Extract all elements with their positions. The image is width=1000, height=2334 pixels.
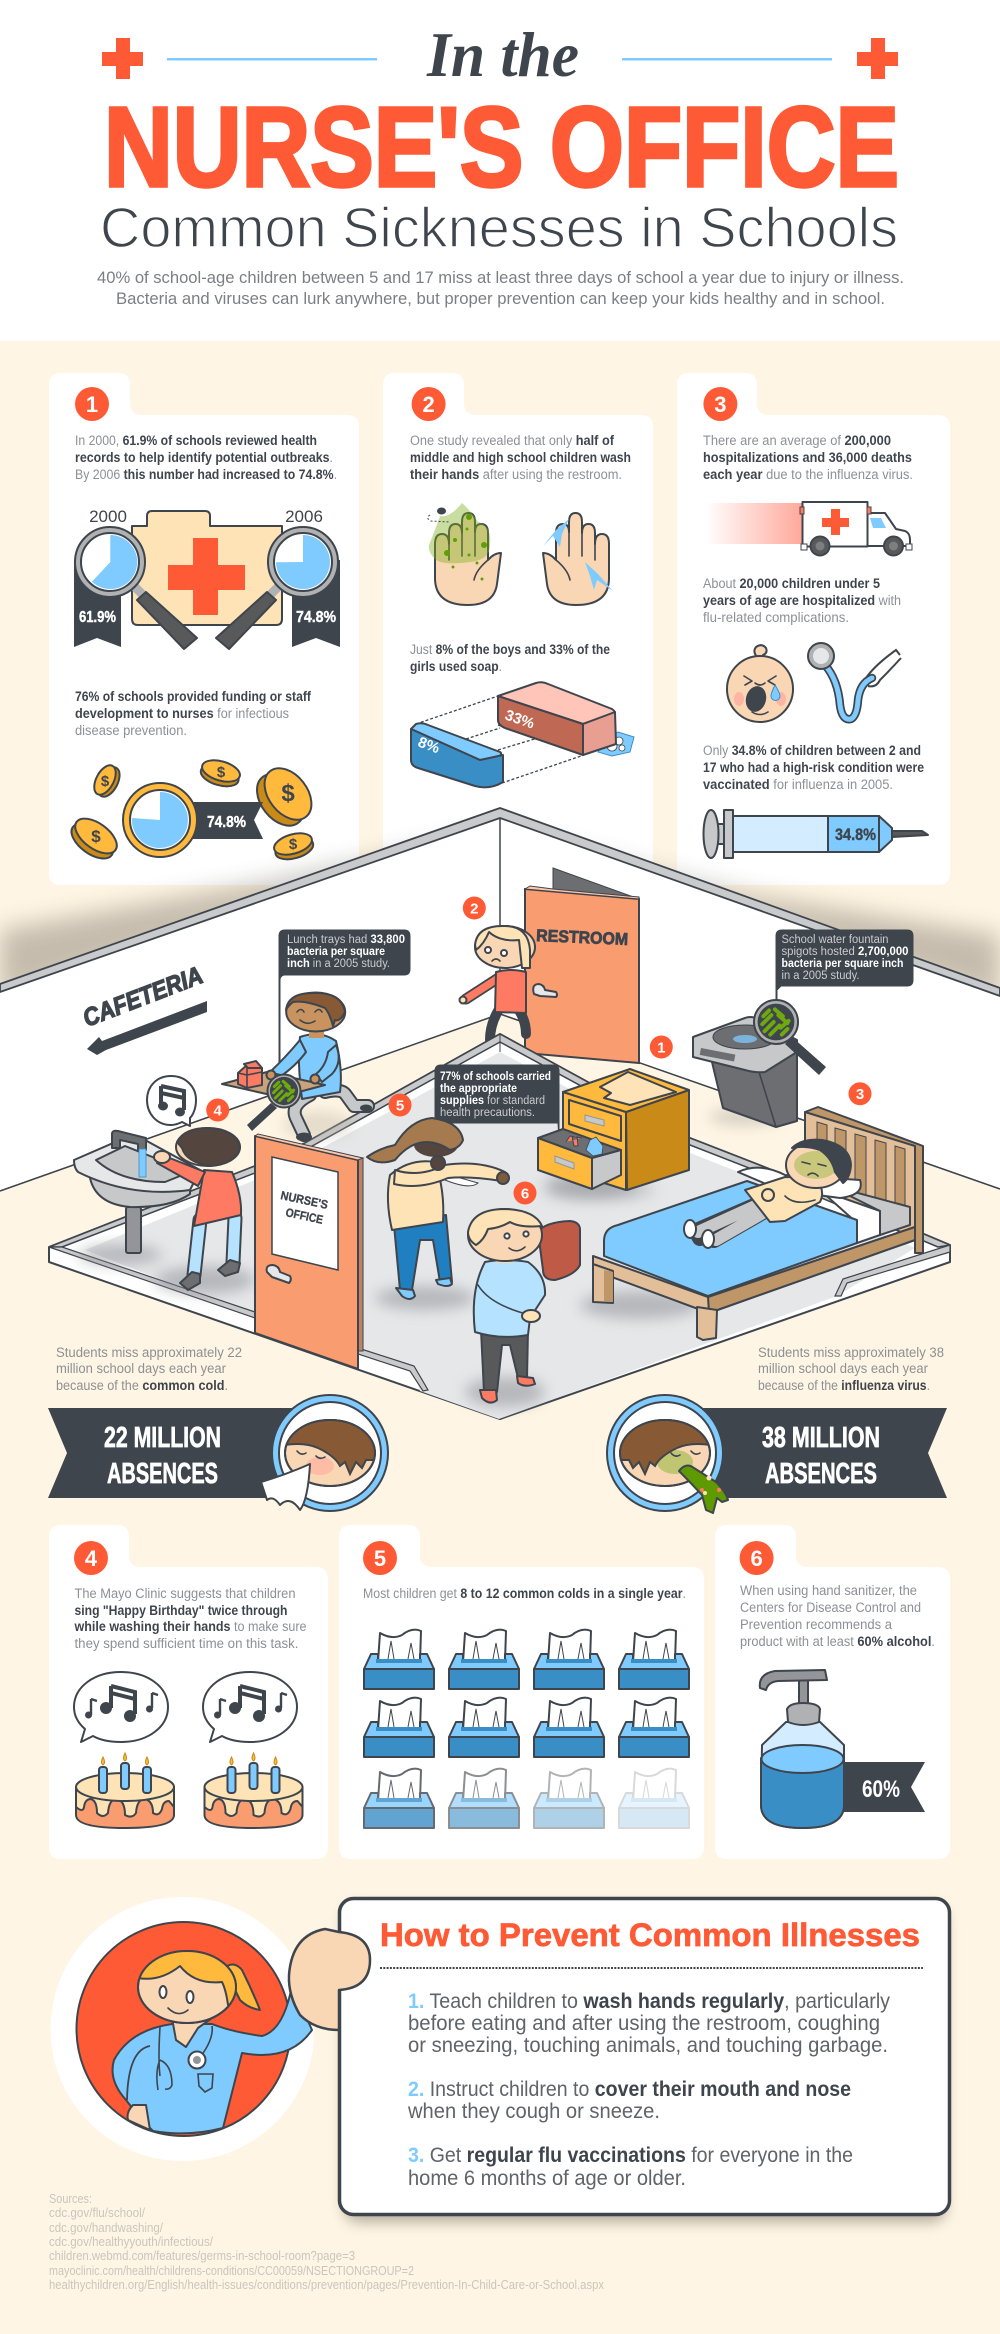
panel: card 5 common colds xyxy=(339,1525,704,1859)
text: records: By 2006 this number had increased to 74.8%. xyxy=(75,467,337,482)
text: common cold: because of the common cold. xyxy=(56,1378,228,1393)
tip 3 xyxy=(408,2144,853,2190)
text: funding: development to nurses for infectious xyxy=(75,706,289,721)
box xyxy=(340,1898,950,2214)
corridor floor xyxy=(0,1014,1000,1300)
text: funding xyxy=(75,689,311,738)
banner: 22 million absences: 22 MILLION xyxy=(104,1422,221,1454)
number badge 4: 4 xyxy=(85,1546,98,1571)
text: vaccinated: Only 34.8% of children between 2 and xyxy=(703,743,921,758)
student with lunch tray xyxy=(222,992,372,1142)
back wall top band xyxy=(49,1034,950,1247)
callout: water fountain: School water fountain xyxy=(782,934,888,946)
icon: coins xyxy=(65,756,321,865)
roof band xyxy=(0,808,1000,996)
magnifier: tray bacteria xyxy=(247,1074,300,1131)
tip 1: before eating and after using the restroom, coughing xyxy=(408,2012,880,2035)
decorative line left xyxy=(167,58,377,60)
sources: cdc.gov/flu/school/ xyxy=(49,2206,145,2220)
icon: music bubble 1 xyxy=(74,1672,168,1742)
music speech bubble xyxy=(147,1076,196,1126)
icon: coins: $ xyxy=(101,773,110,790)
text: common cold: Students miss approximately 22 xyxy=(56,1345,242,1360)
icon: coins: $ xyxy=(217,764,226,781)
text: hospitalizations: There are an average of 200,000 xyxy=(703,433,891,448)
sources: healthychildren.org/English/health-issues/conditions/prevention/pages/Prevention-In-Child-Care-or-School.aspx xyxy=(49,2278,605,2292)
title script: In the xyxy=(426,19,579,90)
intro text: Bacteria and viruses can lurk anywhere, but proper prevention can keep your kids healthy and in school. xyxy=(116,289,885,308)
badge 3: 3 xyxy=(856,1086,864,1103)
icon: right plus xyxy=(857,38,898,79)
tip 3: home 6 months of age or older. xyxy=(408,2167,686,2190)
badge 5: 5 xyxy=(396,1098,404,1114)
text: common cold: million school days each year xyxy=(56,1361,226,1376)
text: hospitalizations xyxy=(703,433,913,482)
callout: lunch trays: Lunch trays had 33,800 xyxy=(287,934,405,946)
callout: supplies: supplies for standard xyxy=(440,1095,545,1107)
number badge 3: 3 xyxy=(714,392,727,417)
text: mayo clinic: they spend sufficient time on this task. xyxy=(74,1636,298,1651)
icon: sanitizer bottle xyxy=(760,1670,844,1828)
sources: children.webmd.com/features/germs-in-school-room?page=3 xyxy=(49,2249,355,2263)
box shadow xyxy=(344,1906,946,2222)
water fountain xyxy=(693,1017,797,1127)
chart: syringe 34.8%: 34.8% xyxy=(835,825,876,844)
blue mattress xyxy=(604,1181,857,1296)
callout: lunch trays: bacteria per square xyxy=(287,946,385,958)
tip 3: 3. Get regular flu vaccinations for everyone in the xyxy=(408,2144,853,2167)
panel: card 6 hand sanitizer xyxy=(715,1525,950,1859)
text: wash hands: their hands after using the restroom. xyxy=(410,467,622,482)
callout: water fountain: bacteria per square inch xyxy=(782,958,904,970)
text: hospitalizations: hospitalizations and 36,000 deaths xyxy=(703,450,912,465)
nurse body xyxy=(112,1985,312,2133)
icon: stethoscope xyxy=(808,643,901,719)
text: mayo clinic: The Mayo Clinic suggests that children xyxy=(74,1586,296,1601)
callout: supplies: the appropriate xyxy=(440,1083,517,1095)
nurse's office door xyxy=(255,1134,363,1369)
ribbon 61.9% xyxy=(74,560,121,647)
badge 3 xyxy=(848,1082,872,1105)
icon: left plus xyxy=(102,38,143,79)
banner: 38 million absences: 38 MILLION xyxy=(762,1422,880,1454)
intro text: 40% of school-age children between 5 and 17 miss at least three days of school a year due to injury or illness. xyxy=(97,268,904,287)
badge 2: 2 xyxy=(470,900,478,918)
text: wash hands: middle and high school children wash xyxy=(410,450,631,465)
text: influenza: because of the influenza virus. xyxy=(758,1378,930,1393)
text: records: In 2000, 61.9% of schools reviewed health xyxy=(75,433,317,448)
text: influenza xyxy=(758,1345,944,1393)
sources: cdc.gov/healthyyouth/infectious/ xyxy=(49,2235,213,2249)
number badge 2 xyxy=(412,387,446,421)
subtitle: Common Sicknesses in Schools xyxy=(100,196,898,260)
icon: coins: $ xyxy=(281,780,295,807)
student washing hands xyxy=(154,1128,241,1290)
sources: Sources: xyxy=(49,2192,92,2206)
callout: water fountain: spigots hosted 2,700,000 xyxy=(782,946,908,958)
card background xyxy=(383,373,653,885)
nurse illustration xyxy=(50,1897,370,2161)
chart: soap bars xyxy=(411,682,634,787)
ribbon 74.8% xyxy=(292,560,340,647)
callout: supplies xyxy=(435,1065,559,1140)
callout: supplies: 77% of schools carried xyxy=(440,1071,551,1083)
text: common cold xyxy=(56,1345,242,1393)
back walls xyxy=(0,810,1000,1191)
text: influenza: Students miss approximately 38 xyxy=(758,1345,944,1360)
bed xyxy=(593,1107,923,1340)
nurse head xyxy=(138,1945,260,2023)
white sheet xyxy=(820,1190,880,1243)
student coughing xyxy=(367,1118,509,1299)
icon: crying baby xyxy=(727,645,793,722)
panel: card 4 sing happy birthday xyxy=(49,1525,328,1859)
text: funding: 76% of schools provided funding or staff xyxy=(75,689,311,704)
nurse hip hand xyxy=(128,2105,150,2130)
student 2 at restroom xyxy=(460,926,535,1040)
year 2006: 2006 xyxy=(285,507,323,526)
number badge 1: 1 xyxy=(86,392,98,417)
sink xyxy=(74,1131,200,1253)
header white band xyxy=(0,0,1000,341)
text: mayo clinic: sing "Happy Birthday" twice through xyxy=(74,1603,288,1618)
number badge 1 xyxy=(75,387,109,421)
text: soap xyxy=(410,642,610,674)
title block xyxy=(97,19,904,308)
banner: 22 million absences: ABSENCES xyxy=(107,1458,218,1490)
nurse hand on box xyxy=(289,1929,370,2030)
icon: music bubble 2 xyxy=(203,1672,297,1742)
card background xyxy=(677,373,950,885)
text: sanitizer: Prevention recommends a xyxy=(740,1617,892,1632)
badge 1 xyxy=(650,1036,673,1058)
red circle xyxy=(76,1922,290,2136)
restroom door: RESTROOM xyxy=(536,926,629,949)
white circle xyxy=(50,1897,314,2161)
text: sanitizer: Centers for Disease Control and xyxy=(740,1600,921,1615)
pillow xyxy=(738,1168,861,1198)
banner 60% xyxy=(840,1762,925,1812)
text: children under 5: years of age are hospitalized with xyxy=(703,593,901,608)
tip 1: 1. Teach children to wash hands regularly, particularly xyxy=(408,1990,890,2013)
text: wash hands: One study revealed that only half of xyxy=(410,433,614,448)
magnifier 2000 pie xyxy=(75,527,197,649)
badge 4: 4 xyxy=(214,1102,223,1120)
nurse's office door: NURSE'S xyxy=(279,1188,329,1212)
text: colds: Most children get 8 to 12 common colds in a single year. xyxy=(363,1586,686,1601)
heading: How to Prevent Common Illnesses xyxy=(380,1917,920,1953)
callout: water fountain xyxy=(776,930,913,1000)
intro text xyxy=(97,268,904,308)
sources xyxy=(49,2192,605,2292)
panel: card 2 hand washing xyxy=(383,373,653,885)
text: hospitalizations: each year due to the influenza virus. xyxy=(703,467,913,482)
stethoscope on nurse xyxy=(157,2026,213,2092)
badge 4 xyxy=(206,1098,229,1122)
dotted divider xyxy=(380,1967,923,1969)
number badge 5: 5 xyxy=(374,1546,386,1571)
text: vaccinated xyxy=(703,743,924,792)
callout: supplies: health precautions. xyxy=(440,1107,535,1119)
headboard xyxy=(805,1107,923,1253)
banner 60%: 60% xyxy=(862,1776,900,1803)
text: influenza: million school days each year xyxy=(758,1361,928,1376)
ribbon 74.8%: 74.8% xyxy=(296,609,336,626)
icon: medical folder xyxy=(132,511,282,625)
ribbon 61.9%: 61.9% xyxy=(79,609,116,626)
text: vaccinated: 17 who had a high-risk condition were xyxy=(703,760,924,775)
text: sanitizer xyxy=(740,1583,935,1649)
corner marker xyxy=(499,1034,501,1052)
badge 6: 6 xyxy=(521,1186,529,1202)
roof shadow xyxy=(0,832,1000,1000)
banner 74.8%: 74.8% xyxy=(207,814,246,831)
coin pie chart xyxy=(123,783,197,857)
chart: tissue boxes xyxy=(364,1630,689,1828)
icon: coins: $ xyxy=(289,836,298,853)
text: wash hands xyxy=(410,433,631,482)
panel: card 3 influenza xyxy=(677,373,950,885)
icon: coins: $ xyxy=(91,827,101,846)
panel: card 1 school health records xyxy=(49,373,359,885)
chart: syringe 34.8% xyxy=(704,810,928,858)
card background xyxy=(715,1525,950,1859)
badge 5 xyxy=(388,1094,412,1116)
floor xyxy=(85,1052,915,1419)
sources: cdc.gov/handwashing/ xyxy=(49,2221,163,2235)
badge 2 xyxy=(463,896,486,920)
number badge 5 xyxy=(363,1541,397,1575)
badge 1: 1 xyxy=(657,1040,665,1056)
student 6 with backpack xyxy=(468,1209,580,1403)
panel: prevention box xyxy=(340,1898,950,2222)
callout: water fountain: in a 2005 study. xyxy=(782,970,860,982)
room illustration xyxy=(0,808,1000,1419)
icon: clean hand xyxy=(543,513,613,605)
text: children under 5: flu-related complications. xyxy=(703,610,849,625)
icon: sneezing face xyxy=(261,1395,388,1511)
tip 2: 2. Instruct children to cover their mouth and nose xyxy=(408,2078,851,2101)
text: soap: girls used soap. xyxy=(410,659,502,674)
text: mayo clinic: while washing their hands to make sure xyxy=(74,1619,306,1634)
banner: 38 million absences xyxy=(607,1395,947,1513)
tip 1: or sneezing, touching animals, and touching garbage. xyxy=(408,2034,888,2057)
text: funding: disease prevention. xyxy=(75,723,187,738)
sign: cafeteria xyxy=(79,961,207,1055)
sources: mayoclinic.com/health/childrens-conditions/CC00059/NSECTIONGROUP=2 xyxy=(49,2264,414,2278)
magnifier: fountain bacteria xyxy=(754,1000,826,1075)
tip 1 xyxy=(408,1990,890,2057)
banner 74.8% xyxy=(190,802,263,839)
nurse's office door: OFFICE xyxy=(284,1205,324,1227)
tip 2 xyxy=(407,2078,851,2123)
text: sanitizer: When using hand sanitizer, the xyxy=(740,1583,917,1598)
nurse office floor xyxy=(49,1034,950,1419)
sign: cafeteria: CAFETERIA xyxy=(79,961,207,1033)
sick student xyxy=(684,1140,851,1248)
icon: cake 1 xyxy=(76,1753,174,1828)
text: vaccinated: vaccinated for influenza in 2005. xyxy=(703,777,893,792)
icon: cake 2 xyxy=(204,1753,302,1828)
decorative line right xyxy=(622,58,832,60)
badge 6 xyxy=(514,1182,536,1204)
icon: vomiting face xyxy=(607,1395,728,1513)
chart: soap bars: 33% xyxy=(503,707,537,733)
card background xyxy=(49,373,359,885)
magnifier 2006 pie xyxy=(216,527,338,649)
chart: soap bars: 8% xyxy=(416,734,442,757)
text: children under 5: About 20,000 children under 5 xyxy=(703,576,880,591)
restroom door xyxy=(525,868,639,1063)
tip 2: when they cough or sneeze. xyxy=(407,2100,660,2123)
callout: lunch trays: inch in a 2005 study. xyxy=(287,958,390,970)
card background xyxy=(339,1525,704,1859)
text: records: records to help identify potential outbreaks. xyxy=(75,450,333,465)
text: mayo clinic xyxy=(74,1586,306,1651)
frame xyxy=(593,1227,915,1313)
neck xyxy=(172,2018,212,2047)
number badge 6: 6 xyxy=(750,1546,763,1571)
drawer cabinet xyxy=(538,1069,689,1200)
icon: ambulance xyxy=(705,502,912,556)
wall corner and base lines xyxy=(0,818,1000,1191)
front wall top band xyxy=(49,1245,950,1391)
year 2000: 2000 xyxy=(89,507,127,526)
text: records xyxy=(75,433,337,482)
number badge 2: 2 xyxy=(422,392,435,417)
text: children under 5 xyxy=(703,576,901,625)
grey sheet xyxy=(828,1185,910,1235)
milk carton xyxy=(238,1061,262,1088)
callout: lunch trays xyxy=(279,930,410,1070)
number badge 6 xyxy=(740,1541,774,1575)
number badge 3 xyxy=(703,387,737,421)
card background xyxy=(49,1525,328,1859)
icon: dirty hand xyxy=(428,503,501,605)
outer base xyxy=(49,1034,950,1419)
banner: 22 million absences xyxy=(48,1395,388,1511)
floor shadows xyxy=(78,1173,700,1407)
text: soap: Just 8% of the boys and 33% of the xyxy=(410,642,610,657)
text: sanitizer: product with at least 60% alcohol. xyxy=(740,1634,935,1649)
banner: 38 million absences: ABSENCES xyxy=(765,1458,877,1490)
number badge 4 xyxy=(74,1541,108,1575)
